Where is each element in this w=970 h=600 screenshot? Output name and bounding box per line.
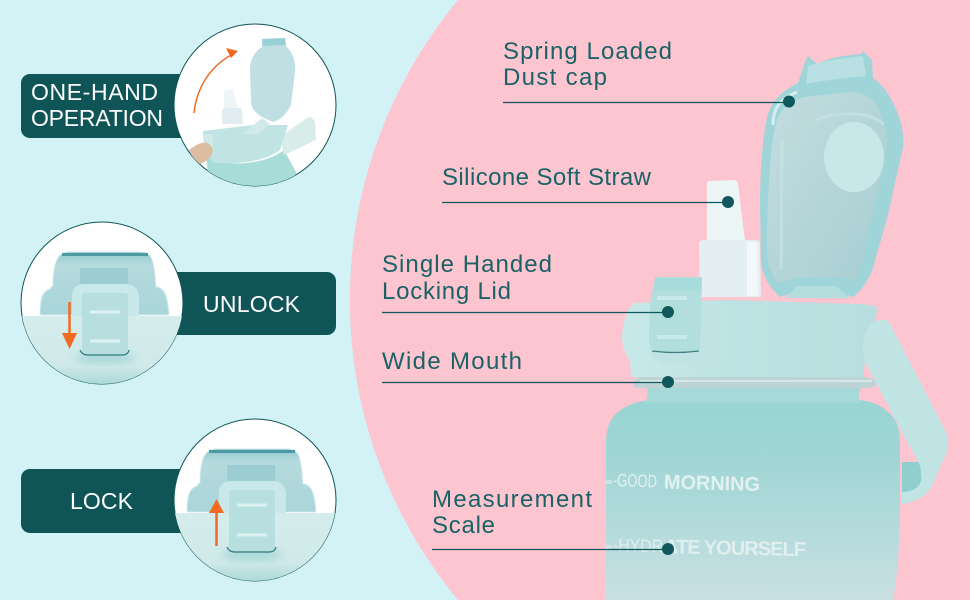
circle: unlock close-up bbox=[20, 222, 190, 386]
bottle text: hydrate yourself: m bbox=[606, 544, 612, 551]
straw collar bbox=[699, 240, 761, 297]
callout: spring loaded dust cap: Spring Loaded bbox=[503, 38, 672, 65]
label: one-hand operation: ONE-HAND bbox=[31, 79, 158, 105]
label: one-hand operation bbox=[21, 74, 201, 138]
callout: wide mouth bbox=[382, 348, 674, 388]
callout: single handed locking lid bbox=[382, 251, 674, 318]
orange arrow bbox=[215, 510, 218, 546]
callout: spring loaded dust cap bbox=[503, 38, 795, 108]
callout: single handed locking lid: Locking Lid bbox=[382, 278, 511, 305]
callout: silicone soft straw: Silicone Soft Straw bbox=[442, 164, 652, 191]
bottle text: hydrate yourself: -HYDR bbox=[613, 535, 663, 556]
bottle text: hydrate yourself bbox=[606, 535, 806, 561]
button recess bbox=[650, 305, 727, 363]
lid base bbox=[622, 300, 878, 377]
label: one-hand operation: OPERATION bbox=[31, 105, 163, 131]
lid seal disc bbox=[824, 122, 884, 192]
circle: one-hand lid opening bbox=[174, 24, 336, 192]
callout: silicone soft straw bbox=[442, 164, 734, 208]
orange arrow bbox=[194, 55, 231, 113]
dust cap lid bbox=[760, 51, 903, 297]
bottle strap bbox=[863, 320, 948, 504]
label: unlock bbox=[160, 272, 336, 335]
label: lock bbox=[21, 469, 201, 533]
callout: measurement scale bbox=[432, 486, 674, 555]
bottle text: hydrate yourself: ATE YOURSELF bbox=[664, 536, 806, 561]
bottle text: good morning: m bbox=[606, 479, 612, 486]
bottle text: good morning bbox=[606, 470, 760, 496]
fingertip bbox=[189, 142, 213, 164]
bottle text: good morning: -GOOD bbox=[613, 470, 657, 491]
pink circle panel bbox=[350, 0, 970, 600]
label: lock: LOCK bbox=[70, 488, 134, 514]
bottle illustration bbox=[606, 51, 948, 600]
circle: lock close-up bbox=[170, 419, 340, 583]
orange arrow bbox=[68, 302, 71, 338]
locking button bbox=[649, 277, 702, 352]
label: unlock: UNLOCK bbox=[203, 291, 301, 317]
bottle neck bbox=[645, 386, 862, 403]
callout: single handed locking lid: Single Handed bbox=[382, 251, 552, 278]
callout: wide mouth: Wide Mouth bbox=[382, 348, 522, 375]
callout: spring loaded dust cap: Dust cap bbox=[503, 64, 607, 91]
lid hinge bbox=[786, 286, 850, 298]
bottle body bbox=[606, 400, 900, 600]
wide mouth ring bbox=[633, 377, 876, 388]
straw bbox=[707, 180, 745, 241]
callout: measurement scale: Measurement bbox=[432, 486, 592, 513]
strap loop bbox=[902, 462, 924, 492]
bottle text: good morning: MORNING bbox=[664, 472, 760, 496]
callout: measurement scale: Scale bbox=[432, 512, 495, 539]
